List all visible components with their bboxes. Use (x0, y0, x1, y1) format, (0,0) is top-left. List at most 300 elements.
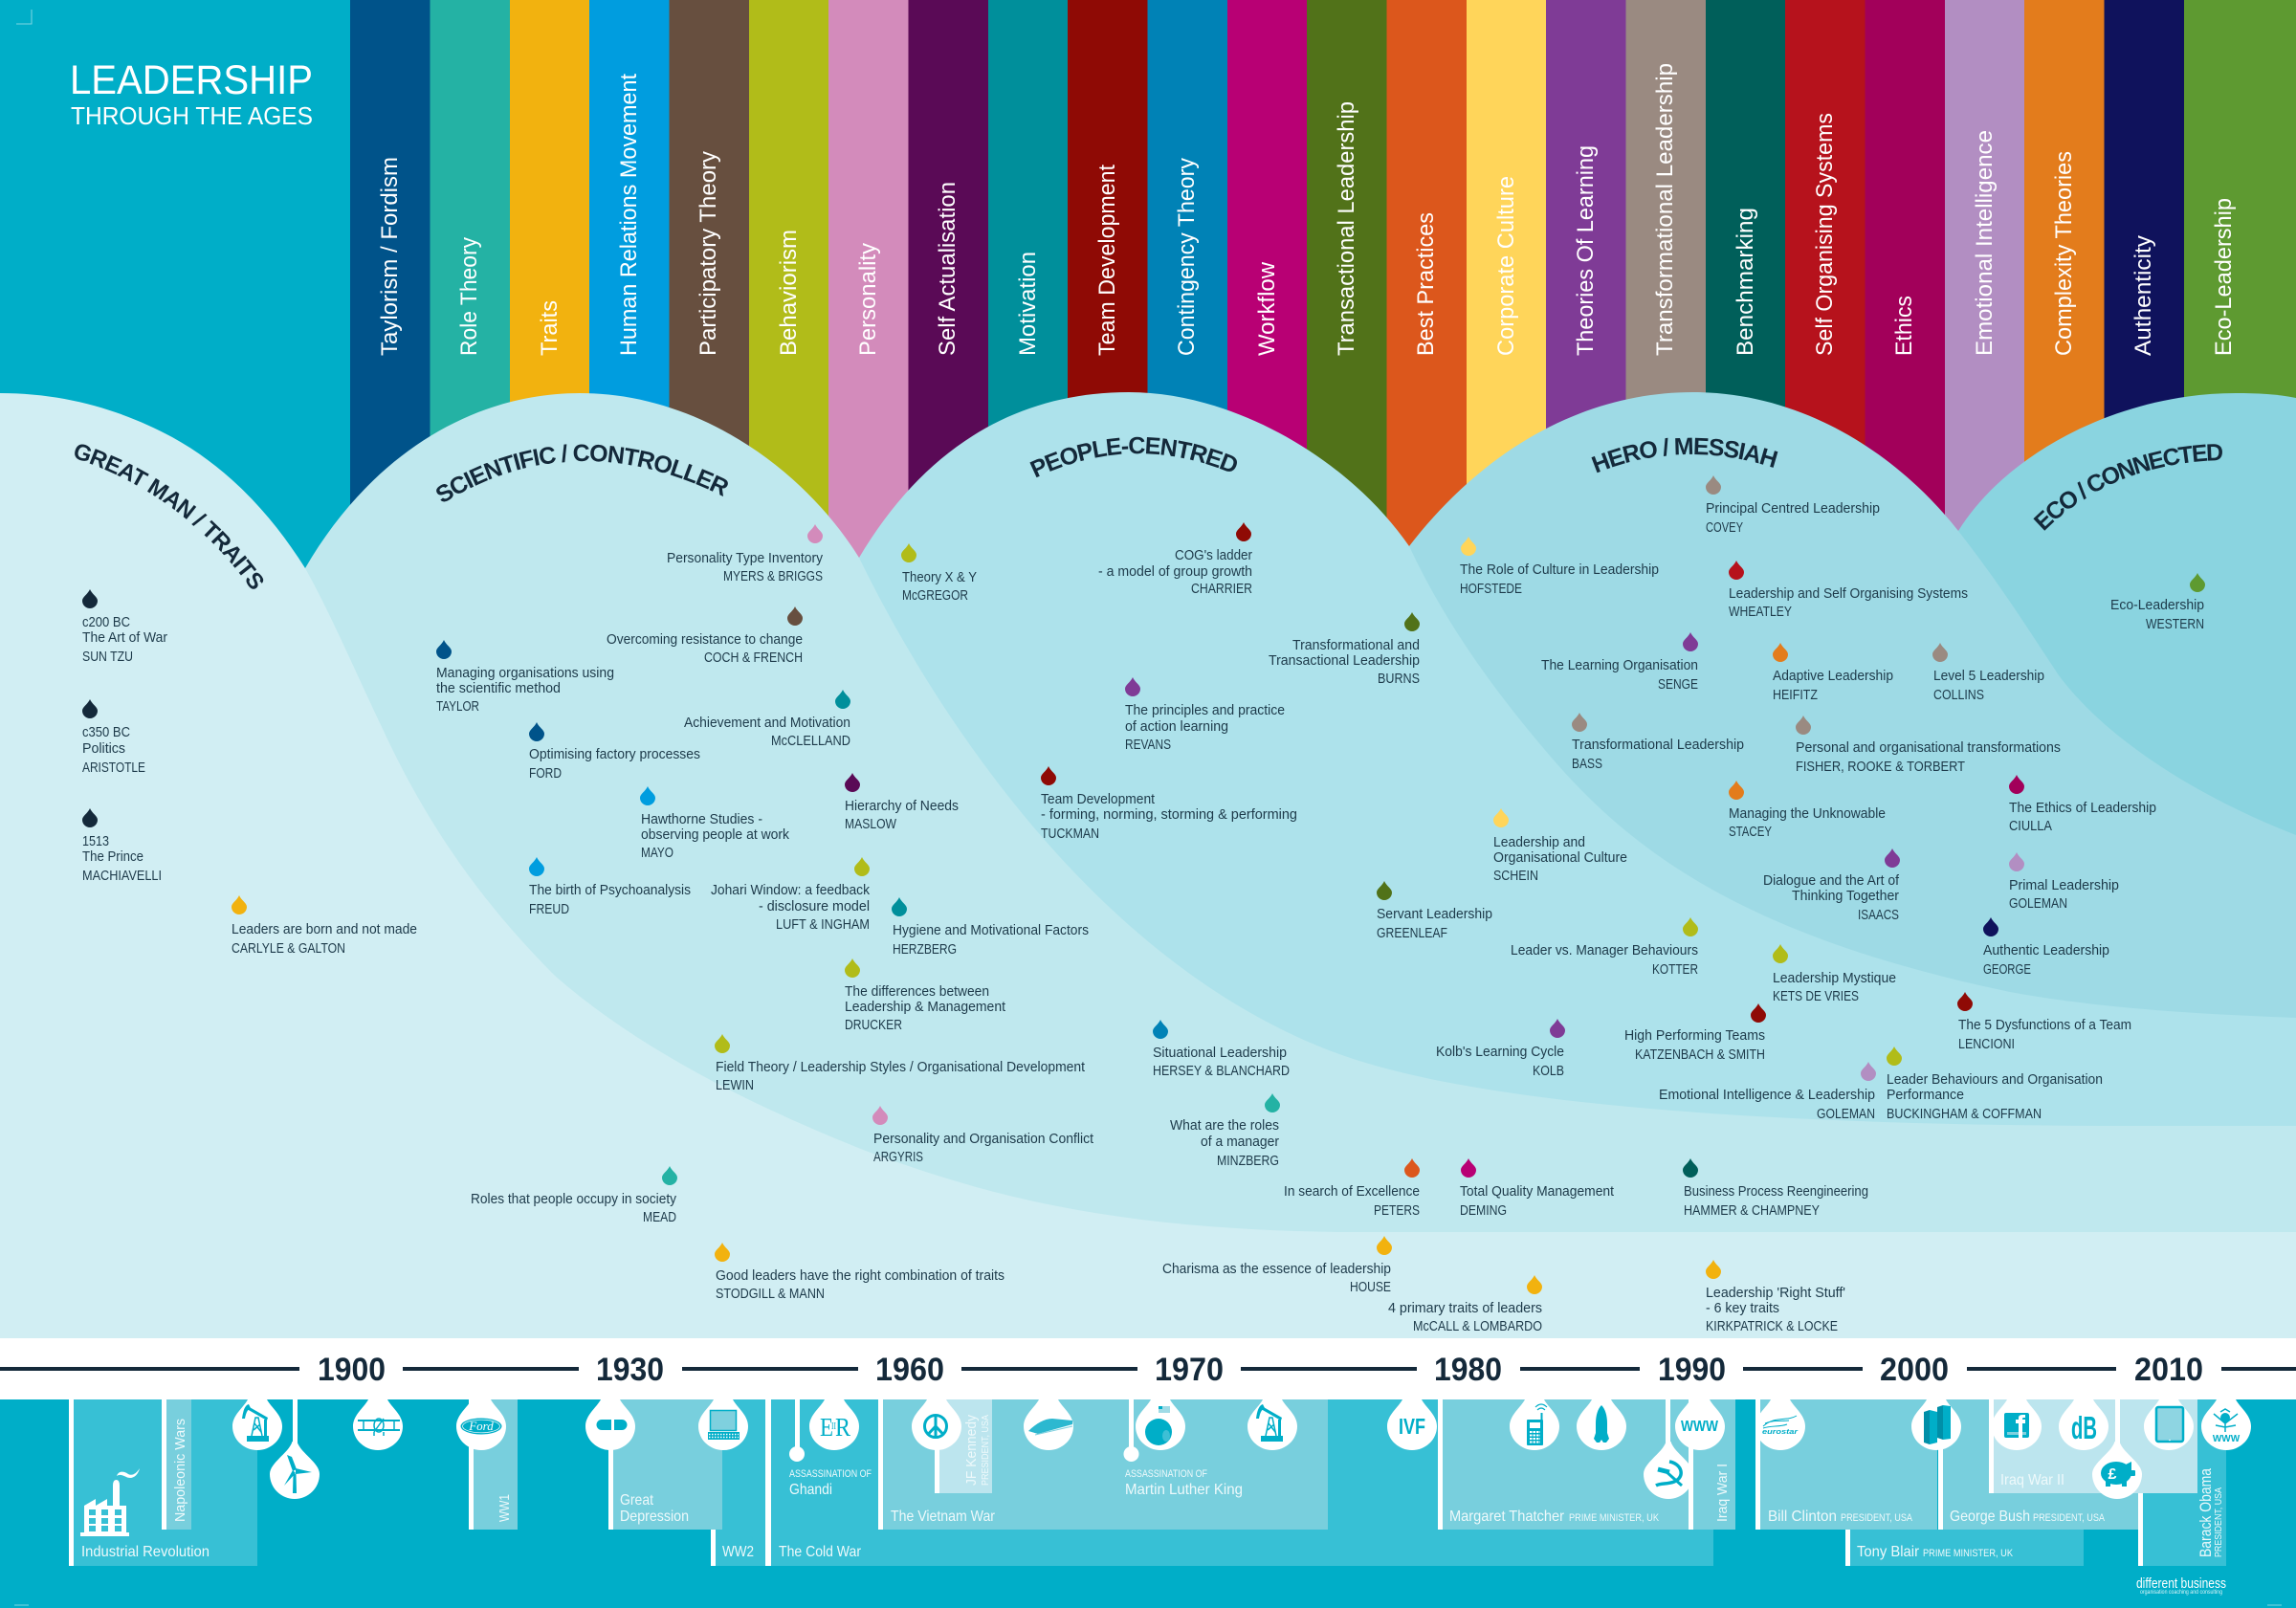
entry: Roles that people occupy in society (471, 1166, 677, 1225)
entry: Adaptive Leadership: Adaptive Leadership (1773, 668, 1893, 684)
band: JF Kennedy: JF Kennedy (963, 1415, 980, 1486)
entry: Charisma (1162, 1236, 1392, 1295)
entry: Situational Leadership: Situational Leadership (1153, 1045, 1287, 1061)
entry: The differences between Leadership and Management: DRUCKER (845, 1017, 902, 1033)
entry: Leaders are born and not made: CARLYLE & GALTON (232, 940, 345, 957)
icon: tablet (2144, 1399, 2194, 1450)
heading: Great Man / Traits: GREAT MAN / TRAITS (75, 444, 264, 589)
stripe: Benchmarking: Benchmarking (1733, 208, 1758, 356)
entry: The Role of Culture in Leadership (1460, 537, 1659, 597)
entry: Personal and organisational transformations: FISHER, ROOKE & TORBERT (1796, 759, 1965, 775)
entry: What are the roles of a manager: What are the roles (1170, 1117, 1279, 1134)
entry: The differences between Leadership and Management: The differences between (845, 983, 989, 1000)
entry: Personal and organisational transformations: Personal and organisational transformations (1796, 739, 2061, 756)
entry: Transformational Leadership (1572, 713, 1744, 772)
band: Great Depression (608, 1399, 722, 1530)
entry: The 5 Dysfunctions of a Team (1957, 992, 2131, 1052)
entry: The Ethics of Leadership: The Ethics of Leadership (2009, 800, 2156, 816)
icon: earth and flag (1136, 1399, 1185, 1450)
entry: The Art of War: c200 BC (82, 614, 130, 630)
entry: What are the roles of a manager: MINZBERG (1217, 1153, 1279, 1169)
stripe: Team Development (1068, 0, 1148, 689)
band: Great Depression: Great (620, 1492, 653, 1509)
entry: Leader Behaviours and Organisation Performance: Performance (1887, 1087, 1964, 1103)
icon: biplane (353, 1399, 403, 1450)
entry: Theory X and Y (901, 543, 977, 604)
stripe: Corporate Culture (1467, 0, 1547, 689)
entry: Transformational and Transactional Leadership: Transactional Leadership (1269, 652, 1420, 669)
timeline years: 1970 (1155, 1352, 1224, 1388)
entry: Good leaders: STODGILL & MANN (716, 1286, 825, 1302)
entry: Hygiene and Motivational Factors: Hygiene and Motivational Factors (893, 922, 1089, 938)
icon: hammer and sickle (1644, 1399, 1693, 1499)
entry: The Ethics of Leadership (2009, 775, 2156, 834)
icon: dB (2059, 1399, 2108, 1450)
entry: Authentic Leadership (1983, 917, 2109, 978)
band: JF Kennedy (935, 1399, 992, 1493)
entry: Total Quality Management (1460, 1158, 1615, 1219)
entry: Field Theory (715, 1034, 1086, 1093)
stripe: Personality (828, 0, 909, 689)
stripe: Authenticity (2105, 0, 2185, 689)
entry: In search of Excellence: PETERS (1374, 1202, 1420, 1219)
entry: Leader vs. Manager Behaviours: KOTTER (1652, 961, 1698, 978)
entry: Emotional Intelligence and Leadership: Emotional Intelligence & Leadership (1659, 1087, 1875, 1103)
entry: Leadership Mystique: KETS DE VRIES (1773, 988, 1859, 1004)
band: The Vietnam War (878, 1399, 1328, 1530)
entry: Level 5 Leadership: Level 5 Leadership (1933, 668, 2044, 684)
panel: scientific / controller (0, 393, 2296, 1338)
entry: The principles and practice of action learning: The principles and practice (1125, 702, 1285, 718)
icon: twin towers (1911, 1399, 1961, 1450)
event: Assassination of Ghandi (789, 1399, 872, 1498)
timeline years (0, 1352, 2296, 1388)
band: Iraq War I: Iraq War I (1714, 1464, 1731, 1522)
entry: Leadership and Self Organising Systems: Leadership and Self Organising Systems (1729, 585, 1968, 602)
stripe: Workflow (1227, 0, 1308, 689)
entry: Servant Leadership: Servant Leadership (1377, 906, 1492, 922)
band: Margaret Thatcher: Margaret Thatcher (1449, 1509, 1565, 1525)
entry: Leadership and Organisational Culture: Leadership and (1493, 834, 1585, 850)
heading: Hero / Messiah: HERO / MESSIAH (1592, 438, 1777, 473)
entry: The Art of War: SUN TZU (82, 649, 133, 665)
entry: Hierarchy of Needs (845, 773, 959, 832)
entry: In search of Excellence (1284, 1158, 1420, 1219)
stripe: Traits (510, 0, 590, 689)
entry: The Prince: 1513 (82, 833, 109, 849)
icon: Eurostar: eurostar (1762, 1427, 1799, 1436)
entry: Politics: Politics (82, 740, 125, 757)
entry: Team Development (1041, 766, 1297, 842)
entry: In search of Excellence: In search of Excellence (1284, 1183, 1420, 1200)
entry: High Performing Teams: High Performing Teams (1624, 1027, 1765, 1044)
entry: Dialogue and the Art of Thinking Together: Dialogue and the Art of (1763, 872, 1900, 889)
entry: Leadership and Self Organising Systems (1729, 561, 1968, 620)
stripe: Self Organising Systems: Self Organising Systems (1812, 113, 1838, 356)
entry: Team Development: - forming, norming, storming & performing (1041, 806, 1297, 823)
stripe: Benchmarking (1706, 0, 1786, 689)
stripe: Transformational Leadership: Transformational Leadership (1652, 63, 1678, 356)
event: Assassination of Martin Luther King: ASSASSINATION OF (1125, 1468, 1207, 1480)
entry: Servant Leadership (1377, 881, 1492, 941)
entry: The 5 Dysfunctions of a Team: LENCIONI (1958, 1036, 2015, 1052)
entry: Adaptive Leadership: HEIFITZ (1773, 687, 1818, 703)
stripe: Theories Of Learning (1546, 0, 1626, 689)
entry: Managing the Unknowable: Managing the Unknowable (1729, 805, 1886, 822)
entry: 4 primary traits of leaders (1388, 1275, 1542, 1334)
entry: Transformational and Transactional Leadership: BURNS (1378, 671, 1420, 687)
icon: computer (698, 1399, 748, 1450)
entry: Leader vs. Manager Behaviours (1511, 917, 1698, 978)
heading: People-Centred: PEOPLE-CENTRED (1029, 436, 1237, 478)
icon: piggy bank (2092, 1399, 2142, 1499)
entry: Roles that people occupy in society: Roles that people occupy in society (471, 1191, 676, 1207)
entry: Business Process Reengineering (1683, 1158, 1868, 1219)
panel: great man / traits (0, 393, 2296, 1338)
entry: The Ethics of Leadership: CIULLA (2009, 818, 2052, 834)
stripe: Self Actualisation: Self Actualisation (935, 182, 960, 356)
timeline years: 1900 (318, 1352, 386, 1388)
stripe: Contingency Theory: Contingency Theory (1174, 158, 1200, 356)
entry: The differences between Leadership and Management (845, 958, 1006, 1033)
entry: Transformational and Transactional Leadership: Transformational and (1292, 637, 1420, 653)
entry: Leadership and Self Organising Systems: WHEATLEY (1729, 604, 1792, 620)
band: Barack Obama: Barack Obama (2197, 1468, 2215, 1557)
entry: Authentic Leadership: GEORGE (1983, 961, 2031, 978)
icon: oil pump 1 (232, 1399, 282, 1450)
entry: Good leaders (715, 1243, 1004, 1302)
event: Assassination of Ghandi: Ghandi (789, 1482, 832, 1498)
icon: thistle www (2201, 1399, 2251, 1450)
entry: Hawthorne Studies: observing people at work (641, 826, 789, 843)
stripe: Participatory Theory: Participatory Theory (695, 151, 721, 356)
entry: The Role of Culture in Leadership: HOFSTEDE (1460, 581, 1522, 597)
entry: Achievement and Motivation (684, 690, 850, 749)
stripe: Emotional Intelligence (1945, 0, 2025, 689)
title: LEADERSHIP (70, 57, 313, 103)
icon: mobile phone (1510, 1399, 1559, 1450)
band: The Cold War (765, 1399, 1713, 1566)
stripe: Self Organising Systems (1785, 0, 1866, 689)
stripe: Human Relations Movement: Human Relations Movement (616, 74, 642, 356)
entry: Hawthorne Studies: MAYO (641, 845, 673, 861)
entry: Team Development: Team Development (1041, 791, 1156, 807)
icon: wind turbine (270, 1399, 320, 1499)
band: George Bush: George Bush (1950, 1509, 2030, 1525)
panel: people-centred (859, 392, 2296, 1338)
band: WW1: WW1 (497, 1494, 513, 1522)
entry: 4 primary traits of leaders: McCALL & LOMBARDO (1413, 1318, 1542, 1334)
stripe: Motivation: Motivation (1015, 252, 1041, 356)
stripe: Eco-Leadership (2184, 0, 2296, 689)
entry: Johari Window (711, 857, 870, 933)
stripe: Personality: Personality (855, 243, 881, 356)
entry: COG's ladder (1098, 522, 1252, 597)
stripe: Complexity Theories: Complexity Theories (2051, 151, 2077, 356)
timeline years: 1980 (1434, 1352, 1502, 1388)
entry: Managing the Unknowable (1729, 781, 1886, 840)
band: Barack Obama (2138, 1399, 2226, 1566)
entry: Leadership Mystique: Leadership Mystique (1773, 970, 1896, 986)
entry: What are the roles of a manager (1170, 1093, 1280, 1169)
entry: Theory X and Y: Theory X & Y (902, 569, 977, 585)
icon: ER royal cypher (809, 1399, 859, 1450)
entry: Leadership and Organisational Culture: Organisational Culture (1493, 849, 1627, 866)
stripe: Role Theory: Role Theory (456, 237, 482, 356)
title: THROUGH THE AGES (71, 101, 313, 130)
entry: Leader vs. Manager Behaviours: Leader vs. Manager Behaviours (1511, 942, 1698, 958)
entry: Johari Window: Johari Window: a feedback (711, 882, 870, 898)
entry: COG's ladder: COG's ladder (1175, 547, 1252, 563)
entry: COG's ladder: - a model of group growth (1098, 563, 1252, 580)
entry: Field Theory: Field Theory / Leadership Styles / Organisational Development (716, 1059, 1086, 1075)
entry: Transformational Leadership: Transformational Leadership (1572, 737, 1744, 753)
entry: The Art of War (82, 589, 167, 665)
entry: Servant Leadership: GREENLEAF (1377, 925, 1447, 941)
stripe: Transactional Leadership (1307, 0, 1387, 689)
entry: Business Process Reengineering: Business Process Reengineering (1684, 1183, 1868, 1200)
entry: Optimising factory processes (529, 722, 700, 782)
stripe: Behaviorism: Behaviorism (776, 230, 802, 356)
icon: ER royal cypher: E (820, 1413, 833, 1442)
entry: Personality Type Inventory (667, 524, 823, 584)
event: Assassination of Martin Luther King (1123, 1399, 1243, 1498)
entry: Overcoming resistance to change (607, 606, 803, 666)
icon: Ford logo: Ford (468, 1419, 494, 1433)
entry: Hierarchy of Needs: MASLOW (845, 816, 897, 832)
entry: Situational Leadership: HERSEY & BLANCHARD (1153, 1063, 1290, 1079)
entry: Leadership Right Stuff: - 6 key traits (1706, 1300, 1779, 1316)
entry: Leadership and Organisational Culture (1493, 808, 1627, 884)
entry: Johari Window: - disclosure model (759, 898, 870, 914)
entry: Personal and organisational transformations (1796, 716, 2061, 775)
band: WW2: WW2 (722, 1544, 754, 1560)
icon: rocket (1577, 1399, 1626, 1450)
icon: thistle www: WWW (2213, 1434, 2241, 1444)
entry: The principles and practice of action learning: REVANS (1125, 737, 1171, 753)
title (70, 57, 313, 130)
entry: Dialogue and the Art of Thinking Together: Thinking Together (1792, 888, 1899, 904)
entry: Charisma: HOUSE (1350, 1279, 1391, 1295)
stripe: Contingency Theory (1148, 0, 1228, 689)
timeline years: 1930 (596, 1352, 664, 1388)
entry: Politics: ARISTOTLE (82, 760, 145, 776)
entry: Primal Leadership: Primal Leadership (2009, 877, 2119, 893)
icon: high speed train (1024, 1399, 1073, 1450)
entry: The Learning Organisation (1541, 632, 1698, 693)
entry: The Prince: MACHIAVELLI (82, 868, 162, 884)
band: Iraq War II: Iraq War II (2000, 1472, 2064, 1488)
entry: COG's ladder: CHARRIER (1191, 581, 1252, 597)
timeline axis band (0, 1338, 2296, 1399)
stripe: Best Practices: Best Practices (1413, 212, 1439, 356)
icon: pill (585, 1399, 635, 1450)
icon: peace symbol (912, 1399, 961, 1450)
entry: The principles and practice of action learning (1125, 677, 1285, 753)
entry: Personality and Organisation Conflict: ARGYRIS (873, 1149, 923, 1165)
entry: Total Quality Management: Total Quality Management (1460, 1183, 1615, 1200)
entry: Politics: c350 BC (82, 724, 130, 740)
entry: Transformational and Transactional Leadership (1269, 612, 1420, 687)
entry: Leader Behaviours and Organisation Performance: Leader Behaviours and Organisation (1887, 1071, 2103, 1088)
heading: Scientific / Controller: SCIENTIFIC / CONTROLLER (436, 444, 728, 501)
band: George Bush: PRESIDENT, USA (2033, 1512, 2106, 1524)
stripe: Role Theory (430, 0, 511, 689)
entry: What are the roles of a manager: of a manager (1201, 1134, 1279, 1150)
stripe: Theories Of Learning: Theories Of Learning (1573, 145, 1599, 356)
band: The Cold War: The Cold War (779, 1544, 862, 1560)
entry: Business Process Reengineering: HAMMER & CHAMPNEY (1684, 1202, 1820, 1219)
entry: Hawthorne Studies (640, 786, 789, 861)
entry: Dialogue and the Art of Thinking Together: ISAACS (1858, 907, 1899, 923)
band: The Vietnam War: The Vietnam War (891, 1509, 996, 1525)
entry: Managing organisations (436, 640, 614, 715)
entry: The 5 Dysfunctions of a Team: The 5 Dysfunctions of a Team (1958, 1017, 2131, 1033)
entry: Achievement and Motivation: McCLELLAND (771, 733, 850, 749)
entry: 4 primary traits of leaders: 4 primary traits of leaders (1388, 1300, 1542, 1316)
band: Industrial Revolution (69, 1399, 257, 1566)
entry: Situational Leadership (1153, 1020, 1290, 1079)
entry: Leader Behaviours and Organisation Performance (1887, 1046, 2103, 1122)
stripe: Best Practices (1387, 0, 1468, 689)
stripe: Team Development: Team Development (1094, 165, 1120, 356)
band: Margaret Thatcher (1438, 1399, 1735, 1530)
timeline years: 1990 (1658, 1352, 1726, 1388)
icon: dB: dB (2071, 1410, 2097, 1445)
entry: Personality Type Inventory: Personality Type Inventory (667, 550, 823, 566)
band: Napoleonic Wars: Napoleonic Wars (172, 1419, 188, 1522)
entry: The Art of War: The Art of War (82, 629, 167, 646)
band: Napoleonic Wars (162, 1399, 191, 1530)
icon: ER royal cypher: R (835, 1413, 850, 1442)
band: Margaret Thatcher: PRIME MINISTER, UK (1569, 1512, 1660, 1524)
icon: Eurostar (1755, 1399, 1805, 1450)
entry: The birth of Psychoanalysis: FREUD (529, 901, 569, 917)
entry: Leadership Right Stuff: KIRKPATRICK & LOCKE (1706, 1318, 1838, 1334)
entry: Leader Behaviours and Organisation Performance: BUCKINGHAM & COFFMAN (1887, 1106, 2042, 1122)
stripe: Traits: Traits (537, 300, 563, 356)
entry: Johari Window: LUFT & INGHAM (776, 916, 870, 933)
event: Assassination of Ghandi: ASSASSINATION OF (789, 1468, 872, 1480)
stripe: Ethics (1866, 0, 1946, 689)
icon: IVF (1387, 1399, 1437, 1450)
entry: High Performing Teams (1624, 1003, 1766, 1063)
entry: Managing organisations: the scientific method (436, 680, 561, 696)
band: Iraq War I (1689, 1399, 1735, 1530)
entry: The Prince (82, 808, 162, 884)
entry: Personality Type Inventory: MYERS & BRIGGS (723, 568, 823, 584)
entry: Adaptive Leadership (1773, 643, 1893, 703)
band: Tony Blair (1845, 1530, 2084, 1566)
entry: Total Quality Management: DEMING (1460, 1202, 1507, 1219)
entry: Managing organisations: TAYLOR (436, 698, 479, 715)
stripe: Human Relations Movement (589, 0, 670, 689)
entry: The Learning Organisation: The Learning Organisation (1541, 657, 1698, 673)
entry: Principal Centred Leadership (1706, 475, 1880, 536)
entry: Managing the Unknowable: STACEY (1729, 824, 1772, 840)
entry: Leadership and Organisational Culture: SCHEIN (1493, 868, 1538, 884)
entry: High Performing Teams: KATZENBACH & SMITH (1635, 1046, 1765, 1063)
icon: WWW (1675, 1399, 1725, 1450)
entry: Primal Leadership: GOLEMAN (2009, 895, 2067, 912)
stripe: Taylorism / Fordism: Taylorism / Fordism (377, 157, 403, 356)
entry: Kolb's Learning Cycle (1436, 1019, 1565, 1079)
logo: different business: different business (2136, 1575, 2226, 1592)
band: WW2 (711, 1399, 765, 1566)
entry: Roles that people occupy in society: MEAD (643, 1209, 676, 1225)
stripe: Corporate Culture: Corporate Culture (1493, 176, 1519, 356)
entry: Charisma: Charisma as the essence of leadership (1162, 1261, 1391, 1277)
band: Great Depression: Depression (620, 1509, 689, 1525)
stripe: Complexity Theories (2024, 0, 2105, 689)
entry: Theory X and Y: McGREGOR (902, 587, 968, 604)
band: George Bush (1938, 1399, 2138, 1530)
entry: The Role of Culture in Leadership: The Role of Culture in Leadership (1460, 562, 1659, 578)
entry: Optimising factory processes: Optimising factory processes (529, 746, 700, 762)
entry: Optimising factory processes: FORD (529, 765, 562, 782)
timeline years: 2000 (1880, 1352, 1949, 1388)
stripe: Eco-Leadership: Eco-Leadership (2211, 198, 2237, 356)
stripe: Taylorism / Fordism (350, 0, 430, 689)
icon: Ford logo (456, 1399, 506, 1450)
entry: Eco-Leadership: Eco-Leadership (2110, 597, 2204, 613)
entry: Emotional Intelligence and Leadership: GOLEMAN (1817, 1106, 1875, 1122)
entry: Principal Centred Leadership: Principal Centred Leadership (1706, 500, 1880, 517)
entry: Level 5 Leadership: COLLINS (1933, 687, 1984, 703)
entry: Hygiene and Motivational Factors (892, 897, 1089, 958)
entry: The differences between Leadership and Management: Leadership & Management (845, 999, 1006, 1015)
entry: Dialogue and the Art of Thinking Together (1763, 848, 1900, 923)
entry: Transformational Leadership: BASS (1572, 756, 1602, 772)
entry: Kolb's Learning Cycle: KOLB (1533, 1063, 1564, 1079)
entry: Politics (82, 699, 145, 776)
panel: hero / messiah (1409, 392, 2296, 1338)
entry: The birth of Psychoanalysis: The birth of Psychoanalysis (529, 882, 691, 898)
icon: oil pump 2 (1247, 1399, 1297, 1450)
entry: Primal Leadership (2009, 852, 2119, 912)
stripe: Behaviorism (749, 0, 829, 689)
entry: Personality and Organisation Conflict (872, 1106, 1094, 1165)
timeline years: 1960 (875, 1352, 944, 1388)
icon: piggy bank: £ (2108, 1466, 2117, 1483)
band: JF Kennedy: PRESIDENT, USA (981, 1415, 991, 1486)
icon: IVF: IVF (1399, 1414, 1425, 1439)
stripe: Transactional Leadership: Transactional Leadership (1334, 101, 1359, 356)
stripe: Transformational Leadership (1626, 0, 1707, 689)
stripe: Workflow: Workflow (1254, 261, 1280, 356)
entry: Hawthorne Studies: Hawthorne Studies - (641, 811, 762, 827)
stripe: Self Actualisation (909, 0, 989, 689)
band: WW1 (469, 1399, 518, 1530)
logo: different business (2136, 1575, 2226, 1596)
stripe: Emotional Intelligence: Emotional Intelligence (1972, 130, 1998, 356)
heading: Eco / Connected: ECO / CONNECTED (2034, 444, 2222, 531)
icon: ER royal cypher: II (831, 1421, 836, 1432)
band: Bill Clinton: PRESIDENT, USA (1841, 1512, 1913, 1524)
icon: factory (80, 1468, 140, 1536)
band: Tony Blair: PRIME MINISTER, UK (1923, 1548, 2014, 1559)
entry: Eco-Leadership (2110, 573, 2205, 632)
entry: Hygiene and Motivational Factors: HERZBERG (893, 941, 957, 958)
entry: Eco-Leadership: WESTERN (2146, 616, 2204, 632)
entry: Managing organisations: Managing organisations using (436, 665, 614, 681)
band: Bill Clinton: Bill Clinton (1768, 1509, 1837, 1525)
entry: Leadership Right Stuff: Leadership 'Right Stuff' (1706, 1285, 1845, 1301)
entry: Leaders are born and not made: Leaders are born and not made (232, 921, 417, 937)
entry: Hierarchy of Needs: Hierarchy of Needs (845, 798, 959, 814)
band: Tony Blair: Tony Blair (1857, 1544, 1920, 1560)
entry: The birth of Psychoanalysis (529, 857, 691, 917)
